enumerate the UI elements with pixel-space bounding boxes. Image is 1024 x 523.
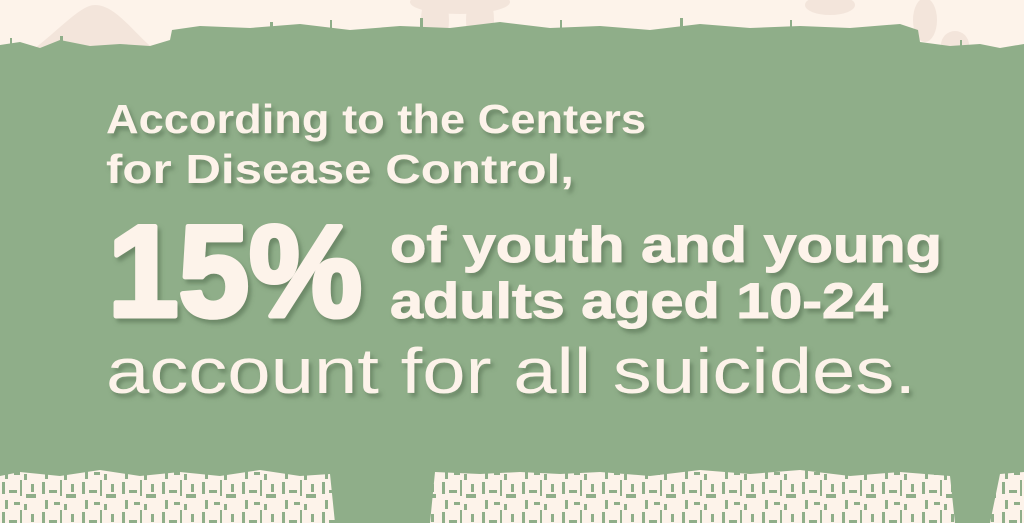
decorative background shapes <box>20 0 969 60</box>
grass texture strip bottom <box>0 470 1024 523</box>
stat label line 2: adults aged 10-24 <box>390 273 888 329</box>
stat label line 1: of youth and young <box>390 217 942 273</box>
intro line 1: According to the Centers <box>106 96 646 142</box>
text block <box>106 96 942 407</box>
intro line 2: for Disease Control, <box>106 146 574 192</box>
big stat 15%: 15% <box>108 198 362 344</box>
closing line: account for all suicides. <box>106 335 916 407</box>
